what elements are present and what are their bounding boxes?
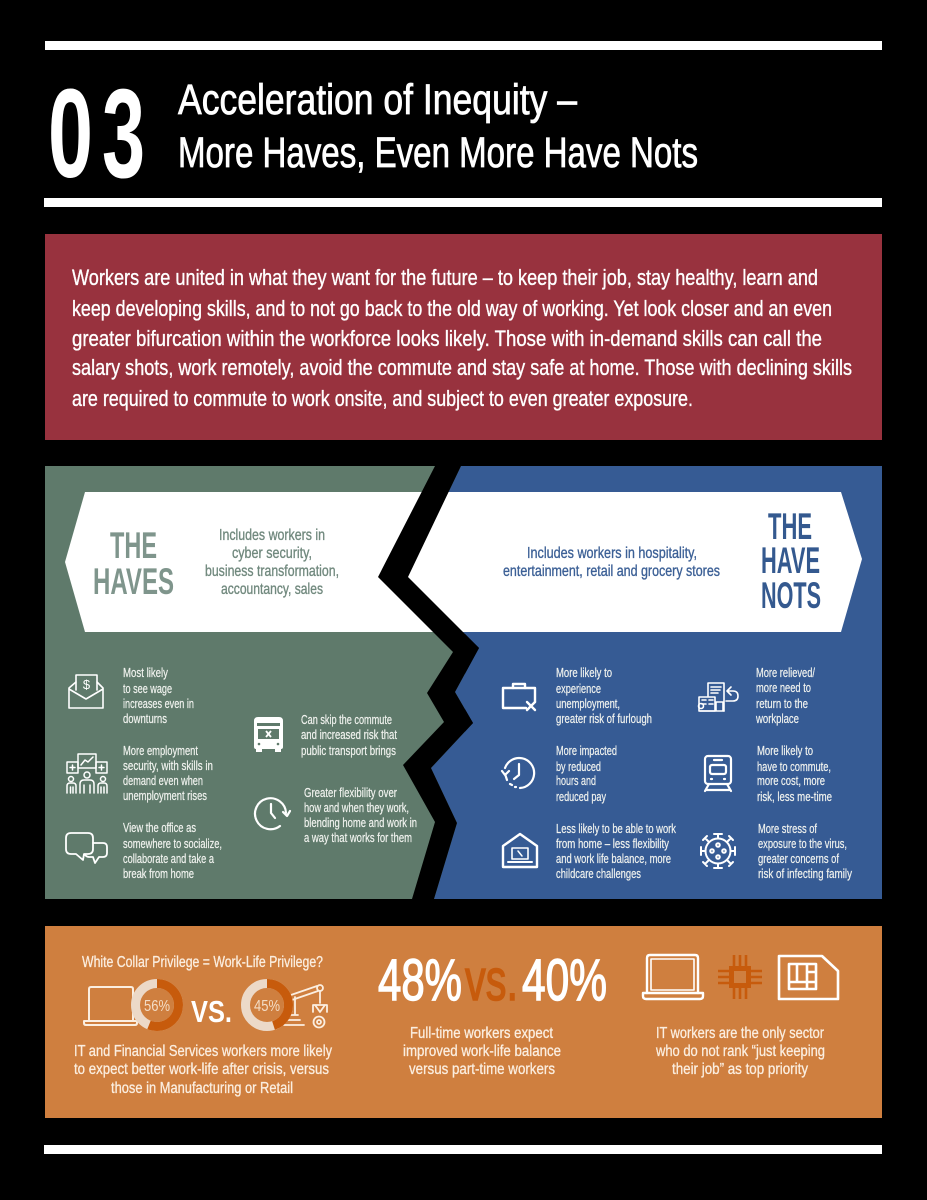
text: work from home: and work life balance, more bbox=[556, 851, 671, 866]
text: unemployment: More likely to bbox=[556, 665, 612, 680]
title bbox=[178, 76, 698, 177]
text: return to workplace: return to the bbox=[756, 696, 808, 711]
banner: white arrow band bbox=[65, 492, 862, 632]
icon: envelope with money: $ bbox=[83, 677, 91, 692]
text: work from home bbox=[556, 821, 676, 881]
text: return to workplace bbox=[755, 665, 815, 726]
heading: the haves bbox=[93, 525, 174, 602]
text: reduced hours: hours and bbox=[556, 773, 596, 788]
panel: intro bbox=[45, 234, 882, 440]
text: employment security: More employment bbox=[123, 743, 198, 758]
donut chart: 56%: 56% bbox=[144, 998, 170, 1015]
text: full-time workers bbox=[403, 1025, 561, 1078]
icon: chat bubbles bbox=[66, 833, 107, 863]
icon: bus bbox=[254, 717, 283, 752]
text: commute bbox=[301, 712, 397, 758]
text: it workers: who do not rank “just keeping bbox=[655, 1043, 825, 1060]
panel: the haves background bbox=[45, 466, 465, 899]
text: office: collaborate and take a bbox=[123, 851, 215, 866]
panel: intro: are required to commute to work onsite, and subject to even greater exposure. bbox=[72, 386, 693, 411]
crack divider bbox=[378, 466, 479, 899]
text: it workers: IT workers are the only sector bbox=[656, 1025, 825, 1042]
text: work from home: Less likely to be able to work bbox=[556, 821, 676, 836]
heading: the haves: THE bbox=[110, 525, 157, 566]
text: virus stress bbox=[758, 821, 852, 881]
vs label: VS. bbox=[191, 994, 232, 1029]
text: virus stress: greater concerns of bbox=[758, 851, 839, 866]
section number: 0 bbox=[48, 63, 93, 204]
text: commute: Can skip the commute bbox=[301, 712, 392, 727]
text: it and financial services: IT and Financial Services workers more likely bbox=[74, 1043, 332, 1060]
panel: work-life stats bbox=[45, 926, 882, 1118]
text: full-time workers: improved work-life balance bbox=[403, 1043, 561, 1060]
text: wage increases: Most likely bbox=[123, 665, 168, 680]
title: More Haves, Even More Have Nots bbox=[178, 129, 698, 177]
icon: building return bbox=[698, 683, 738, 711]
text: haves description: Includes workers in bbox=[219, 527, 325, 544]
text: commute risk: more cost, more bbox=[757, 773, 825, 788]
text: wage increases bbox=[123, 665, 194, 726]
text: full-time workers: Full-time workers expect bbox=[410, 1025, 553, 1042]
text: have nots description: Includes workers in hospitality, bbox=[527, 545, 697, 562]
text: haves description: accountancy, sales bbox=[221, 581, 323, 598]
text: flexibility: blending home and work in bbox=[304, 815, 417, 830]
text: office bbox=[123, 820, 222, 881]
text: full-time workers: versus part-time workers bbox=[409, 1061, 555, 1078]
icon: laptop bbox=[84, 987, 137, 1025]
text: have nots description: entertainment, retail and grocery stores bbox=[503, 563, 720, 580]
text: return to workplace: More relieved/ bbox=[756, 665, 815, 680]
text: wage increases: increases even in bbox=[123, 696, 194, 711]
text: commute risk: have to commute, bbox=[757, 759, 831, 774]
text: office: break from home bbox=[123, 866, 194, 881]
big stat: 48% vs 40%: 40% bbox=[522, 948, 607, 1013]
big stat: 48% vs 40% bbox=[378, 948, 607, 1013]
text: reduced hours: reduced pay bbox=[556, 789, 606, 804]
text: employment security: unemployment rises bbox=[123, 788, 207, 803]
text: return to workplace: more need to bbox=[756, 680, 811, 695]
text: unemployment bbox=[556, 665, 652, 726]
text: haves description: business transformation, bbox=[205, 563, 339, 580]
text: unemployment: unemployment, bbox=[556, 696, 620, 711]
text: it and financial services bbox=[74, 1043, 332, 1097]
text: work from home: childcare challenges bbox=[556, 866, 641, 881]
text: unemployment: greater risk of furlough bbox=[556, 711, 652, 726]
icon: house with laptop bbox=[503, 834, 537, 867]
text: have nots description bbox=[503, 545, 720, 580]
big stat: 48% vs 40%: 48% bbox=[378, 948, 462, 1013]
heading: the have nots bbox=[761, 506, 821, 616]
donut chart: 45%: 45% bbox=[254, 998, 280, 1015]
text: wage increases: to see wage bbox=[123, 681, 172, 696]
text: work from home: from home – less flexibility bbox=[556, 836, 669, 851]
text: commute risk: risk, less me-time bbox=[757, 789, 832, 804]
text: flexibility: a way that works for them bbox=[304, 830, 412, 845]
icon: briefcase with x bbox=[503, 684, 535, 710]
icon: robot arm bbox=[284, 985, 327, 1028]
text: haves description: cyber security, bbox=[232, 545, 312, 562]
text: it workers: their job” as top priority bbox=[672, 1061, 808, 1078]
text: reduced hours: by reduced bbox=[556, 759, 601, 774]
icon: people with chart bbox=[67, 754, 107, 793]
heading: the have nots: HAVE bbox=[761, 540, 820, 581]
text: virus stress: More stress of bbox=[758, 821, 817, 836]
heading: the have nots: THE bbox=[768, 506, 812, 547]
donut chart: 45% bbox=[246, 984, 288, 1026]
text: employment security: demand even when bbox=[123, 773, 203, 788]
text: flexibility bbox=[304, 785, 417, 845]
panel: the have nots background bbox=[408, 466, 882, 899]
donut chart: 56% bbox=[136, 984, 178, 1026]
text: employment security bbox=[123, 743, 213, 803]
text: reduced hours: More impacted bbox=[556, 743, 617, 758]
text: office: somewhere to socialize, bbox=[123, 836, 222, 851]
text: commute: public transport brings bbox=[301, 743, 396, 758]
text: return to workplace: workplace bbox=[755, 711, 799, 726]
heading: the haves: HAVES bbox=[93, 561, 174, 602]
text: employment security: security, with skills in bbox=[123, 758, 213, 773]
text: virus stress: exposure to the virus, bbox=[758, 836, 847, 851]
text: virus stress: risk of infecting family bbox=[758, 866, 852, 881]
text: it and financial services: to expect better work-life after crisis, versus bbox=[74, 1061, 329, 1078]
icon: chip bbox=[718, 955, 762, 999]
text: wage increases: downturns bbox=[123, 711, 167, 726]
text: reduced hours bbox=[556, 743, 617, 804]
icon: sim card bbox=[779, 956, 838, 999]
text: flexibility: Greater flexibility over bbox=[304, 785, 397, 800]
heading: the have nots: NOTS bbox=[761, 575, 821, 616]
icon: train bbox=[705, 756, 731, 791]
text: it workers bbox=[655, 1025, 825, 1078]
text: commute: and increased risk that bbox=[301, 727, 397, 742]
title: Acceleration of Inequity – bbox=[178, 76, 577, 124]
icon: virus bbox=[701, 834, 735, 868]
icon: clock rewind bbox=[502, 758, 534, 788]
text: office: View the office as bbox=[123, 820, 196, 835]
text: unemployment: experience bbox=[556, 681, 601, 696]
text: flexibility: how and when they work, bbox=[304, 800, 409, 815]
section number: 3 bbox=[102, 63, 145, 204]
icon: envelope with money bbox=[69, 675, 103, 708]
heading: white collar privilege: White Collar Privilege = Work-Life Privilege? bbox=[82, 954, 323, 971]
big stat: 48% vs 40%: vs. bbox=[465, 948, 518, 1013]
icon: clock forward bbox=[255, 798, 290, 829]
text: commute risk bbox=[757, 743, 832, 804]
text: haves description bbox=[205, 527, 339, 598]
icon: laptop large bbox=[643, 955, 703, 999]
text: commute risk: More likely to bbox=[757, 743, 813, 758]
text: it and financial services: those in Manufacturing or Retail bbox=[111, 1080, 293, 1097]
